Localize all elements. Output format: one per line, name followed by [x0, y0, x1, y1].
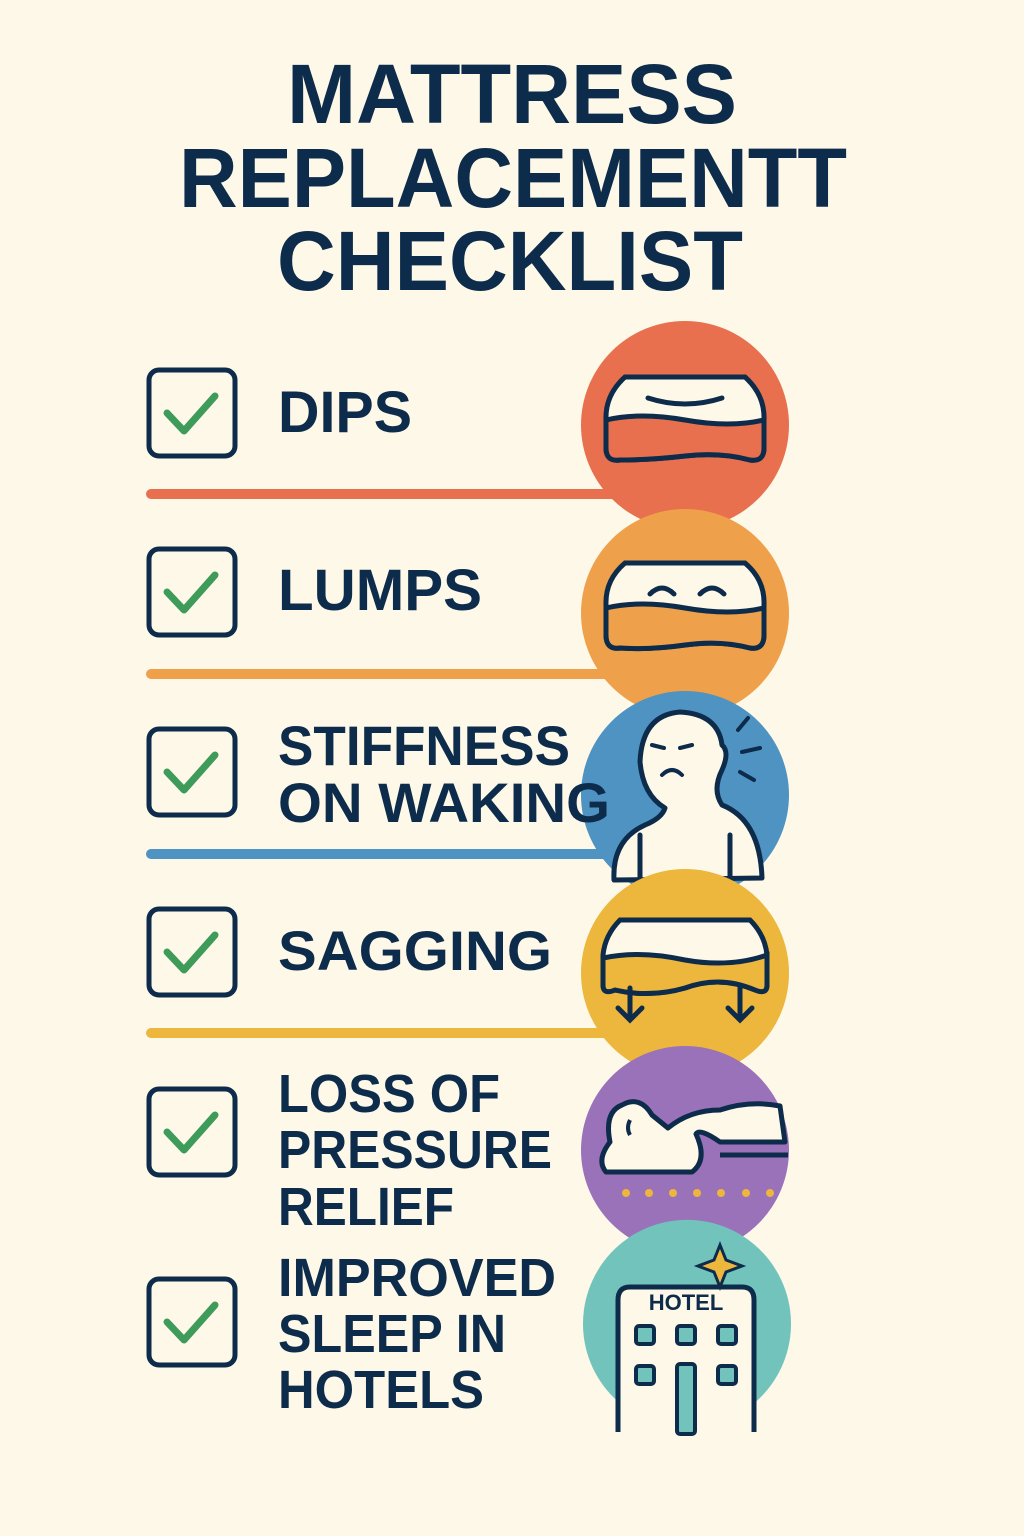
- title: REPLACEMENTT: [179, 131, 847, 225]
- title: [179, 47, 847, 308]
- item: loss of pressure relief: LOSS OF: [278, 1064, 500, 1124]
- item: dips: [149, 370, 412, 456]
- item: lumps: [149, 549, 482, 635]
- item: stiffness on waking: STIFFNESS: [278, 714, 570, 777]
- icon: sleeping person: [581, 1046, 789, 1254]
- item: sagging: SAGGING: [278, 919, 552, 982]
- icon: hotel: HOTEL: [649, 1290, 723, 1315]
- item: stiffness on waking: ON WAKING: [278, 771, 610, 834]
- item: loss of pressure relief: RELIEF: [278, 1177, 454, 1237]
- item: sagging: [149, 909, 552, 995]
- item: improved sleep in hotels: IMPROVED: [278, 1248, 556, 1308]
- divider lines: [151, 494, 620, 1033]
- title: MATTRESS: [287, 47, 737, 141]
- item: improved sleep in hotels: SLEEP IN: [278, 1304, 506, 1364]
- item: improved sleep in hotels: HOTELS: [278, 1360, 484, 1420]
- icon: hotel: [583, 1220, 791, 1434]
- item: loss of pressure relief: [149, 1064, 552, 1237]
- item: stiffness on waking: [149, 714, 610, 834]
- item: dips: DIPS: [278, 380, 412, 445]
- icon: stiff person: [581, 691, 789, 899]
- icon: lumpy mattress: [581, 509, 789, 717]
- icon: dipping mattress: [581, 321, 789, 529]
- icon: sagging mattress: [581, 869, 789, 1077]
- item: loss of pressure relief: PRESSURE: [278, 1120, 552, 1180]
- title: CHECKLIST: [277, 214, 743, 308]
- item: lumps: LUMPS: [278, 558, 482, 623]
- item: improved sleep in hotels: [149, 1248, 556, 1420]
